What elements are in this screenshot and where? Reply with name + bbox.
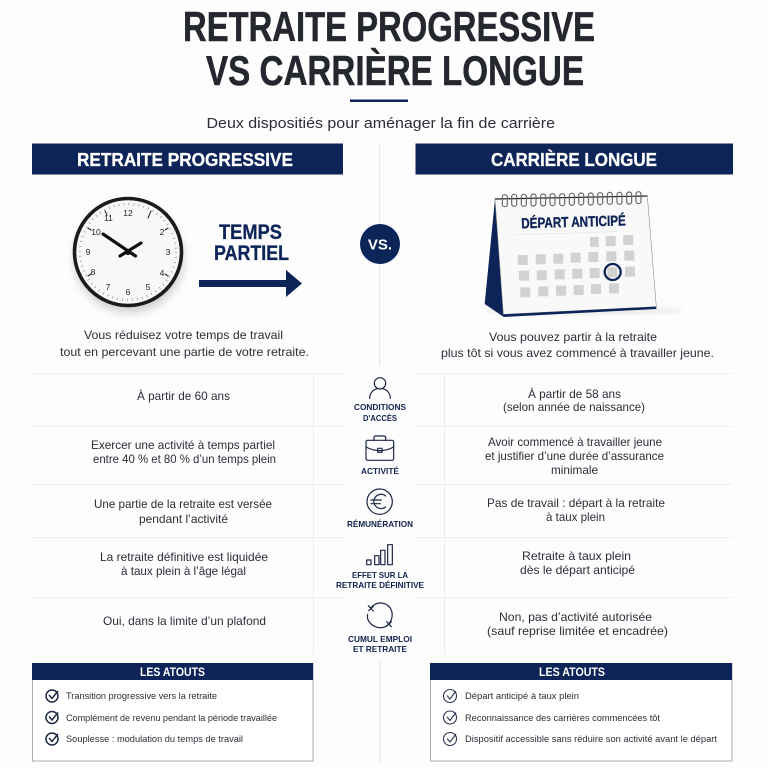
label: cumul emploi et retraite: ET RETRAITE — [353, 644, 407, 654]
right column comparison text: À partir de 58 ans — [528, 386, 621, 401]
icon: clock: 10 — [91, 227, 101, 237]
label: temps partiel — [214, 221, 289, 265]
icon: euro — [367, 489, 392, 514]
right column comparison text: dès le départ anticipé — [520, 563, 635, 577]
title: RETRAITE PROGRESSIVE — [183, 3, 595, 50]
icon: clock: 4 — [160, 268, 165, 278]
left column comparison text: pendant l’activité — [139, 512, 228, 526]
right column comparison text: Retraite à taux plein — [522, 549, 631, 563]
right column comparison text: (selon année de naissance) — [503, 400, 645, 414]
panel: atouts droite: LES ATOUTS — [539, 667, 605, 679]
icon: clock: 2 — [160, 227, 165, 237]
label: effet sur la retraite définitive: RETRAITE DÉFINITIVE — [336, 580, 424, 590]
panel: atouts droite — [430, 663, 732, 761]
icon: VS badge — [360, 224, 400, 264]
right heading: CARRIÈRE LONGUE — [491, 149, 657, 170]
list: atouts droite: Dispositif accessible sans réduire son activité avant le départ — [465, 734, 717, 745]
right column comparison text — [485, 386, 668, 638]
right intro text: plus tôt si vous avez commencé à travailler jeune. — [441, 346, 714, 360]
label: conditions d'accès — [354, 402, 406, 423]
label: effet sur la retraite définitive: EFFET SUR LA — [352, 570, 408, 580]
list: atouts droite: Reconnaissance des carrières commencées tôt — [465, 713, 660, 724]
list: atouts gauche: Souplesse : modulation du temps de travail — [66, 734, 243, 745]
right column comparison text: (sauf reprise limitée et encadrée) — [487, 624, 668, 638]
label: cumul emploi et retraite — [348, 634, 412, 654]
label: cumul emploi et retraite: CUMUL EMPLOI — [348, 634, 412, 644]
list: atouts droite — [465, 691, 717, 745]
right heading — [416, 144, 733, 174]
label: conditions d'accès: D'ACCÈS — [363, 413, 397, 423]
left column comparison text: Exercer une activité à temps partiel — [91, 438, 275, 452]
left column comparison text: entre 40 % et 80 % d’un temps plein — [93, 452, 276, 466]
left heading — [32, 144, 343, 174]
right column comparison text: à taux plein — [546, 510, 605, 524]
list: atouts gauche — [66, 691, 277, 745]
icon: clock: 11 — [104, 213, 113, 223]
left intro text: tout en percevant une partie de votre retraite. — [60, 345, 309, 359]
title: VS CARRIÈRE LONGUE — [206, 47, 584, 94]
list: atouts gauche: Transition progressive vers la retraite — [66, 691, 217, 702]
list: atouts droite: Départ anticipé à taux plein — [465, 691, 579, 702]
right column comparison text: Pas de travail : départ à la retraite — [487, 496, 665, 510]
right column comparison text: et justifier d’une durée d’assurance — [485, 449, 664, 463]
icon: briefcase — [366, 436, 394, 460]
icon: cycle arrows — [367, 603, 392, 628]
list: atouts gauche: Complément de revenu pendant la période travaillée — [66, 713, 277, 724]
icon: clock: 12 — [123, 208, 133, 218]
left column comparison text: La retraite définitive est liquidée — [100, 550, 268, 564]
left heading: RETRAITE PROGRESSIVE — [77, 150, 293, 170]
icon: bars — [367, 545, 392, 565]
subtitle: Deux dispositiés pour aménager la fin de carrière — [206, 115, 555, 132]
label: rémunération: RÉMUNÉRATION — [347, 519, 413, 529]
icon: clock: 3 — [166, 247, 171, 257]
label: temps partiel: TEMPS — [219, 221, 282, 244]
panel: atouts gauche: LES ATOUTS — [140, 667, 205, 679]
icon: clock: 8 — [91, 267, 96, 277]
panel: retraite progressive — [32, 144, 343, 359]
label: effet sur la retraite définitive — [336, 570, 424, 590]
icon: clock: 9 — [86, 247, 91, 257]
left column comparison text: à taux plein à l’âge légal — [121, 564, 246, 578]
icon: VS badge: VS. — [368, 236, 392, 254]
icon: clock — [74, 198, 183, 312]
icon: clock: 7 — [106, 282, 111, 292]
label: conditions d'accès: CONDITIONS — [354, 402, 406, 412]
icon: clock: 5 — [146, 282, 151, 292]
icon: checks — [46, 690, 58, 745]
left column comparison text: Une partie de la retraite est versée — [94, 497, 272, 511]
left column comparison text: À partir de 60 ans — [137, 388, 230, 403]
right intro text — [441, 330, 714, 360]
right intro text: Vous pouvez partir à la retraite — [489, 330, 657, 344]
center column: criteria — [336, 378, 424, 654]
left intro text: Vous réduisez votre temps de travail — [84, 328, 283, 342]
label: temps partiel: PARTIEL — [214, 242, 289, 265]
title — [183, 3, 595, 94]
icon: clock: 6 — [126, 287, 131, 297]
left column comparison text — [91, 388, 276, 628]
icon: checks — [444, 690, 456, 746]
left intro text — [60, 328, 309, 359]
panel: carrière longue — [416, 144, 733, 360]
right column comparison text: Avoir commencé à travailler jeune — [488, 435, 662, 449]
left column comparison text: Oui, dans la limite d’un plafond — [103, 614, 266, 628]
icon: person — [370, 378, 390, 398]
label: activité: ACTIVITÉ — [361, 466, 399, 476]
right column comparison text: minimale — [551, 463, 598, 477]
panel: atouts gauche — [32, 663, 313, 761]
right column comparison text: Non, pas d’activité autorisée — [499, 610, 652, 624]
icon: calendar — [484, 192, 684, 317]
icon: calendar: DÉPART ANTICIPÉ — [521, 212, 626, 232]
arrow — [199, 270, 302, 297]
